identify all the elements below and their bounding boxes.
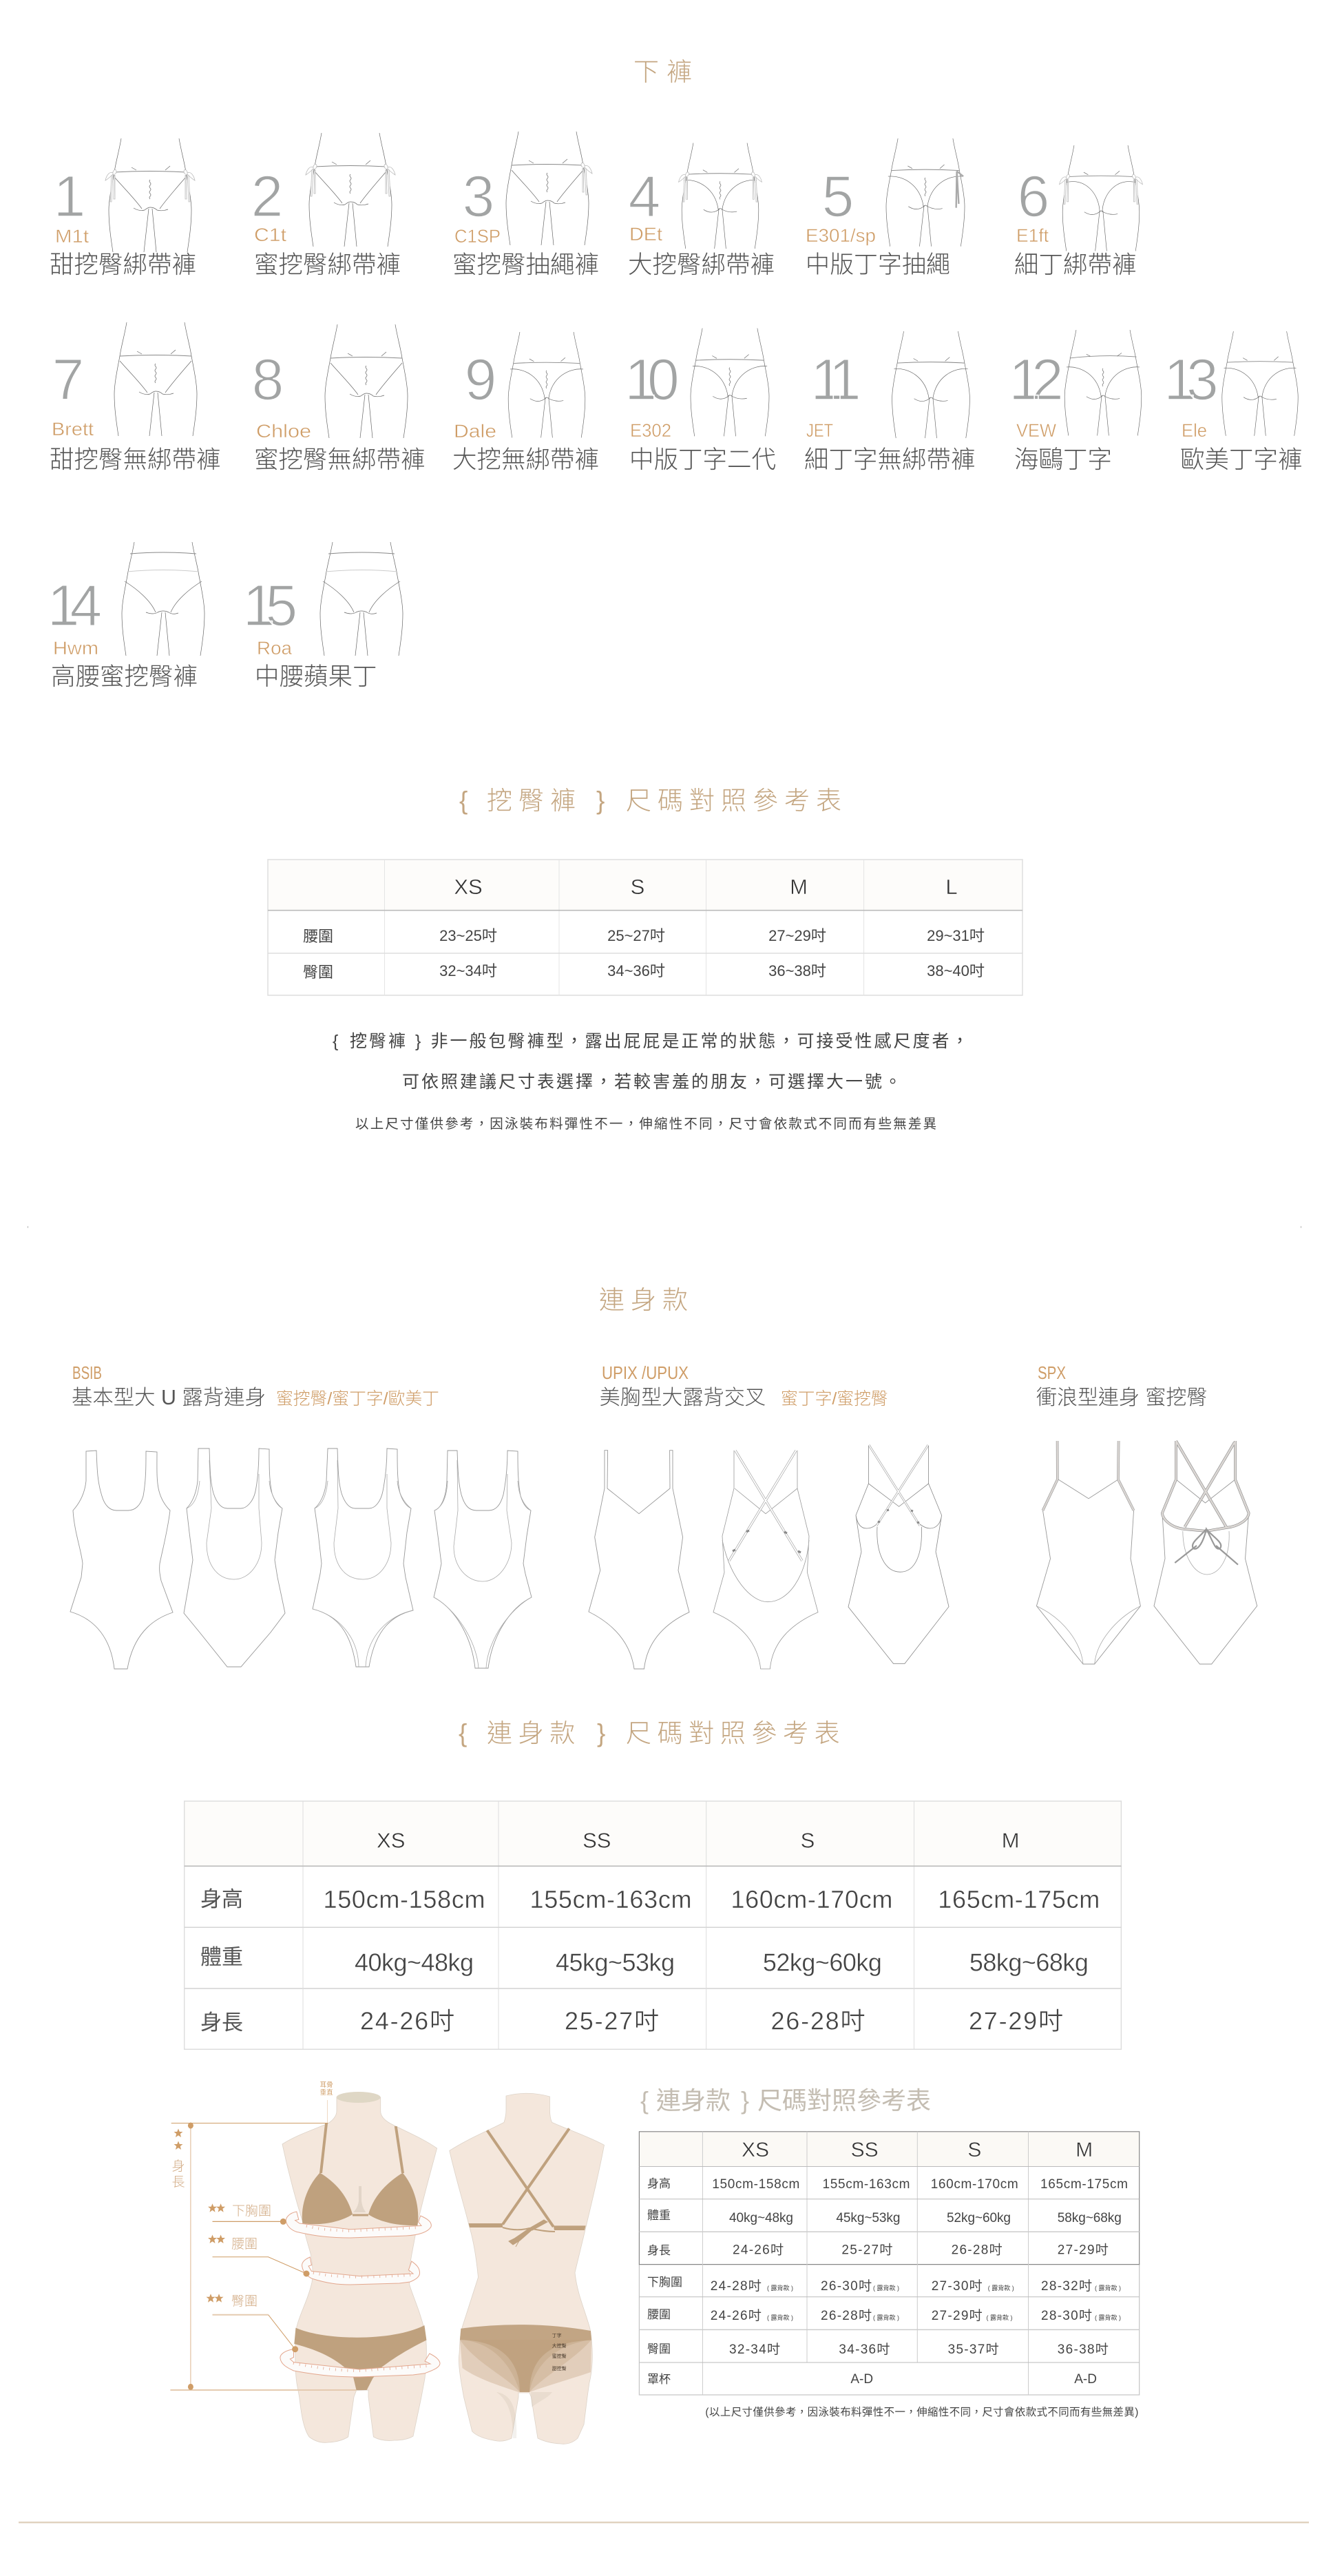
icon: brief 14 figure <box>122 542 204 656</box>
brief 9: 大挖無綁帶褲 <box>452 446 599 473</box>
table: 連身款 sizes: 40kg~48kg <box>355 1949 474 1977</box>
table: 挖臀褲 sizes: L <box>945 875 958 899</box>
icon: SPX back <box>1154 1441 1257 1664</box>
brief 14: 14 <box>48 573 101 638</box>
table: 連身款 detailed sizes: 下胸圍 <box>647 2276 682 2289</box>
brief 9: 9 <box>465 347 496 412</box>
icon: SPX front <box>1036 1441 1140 1664</box>
text block: 挖臀褲 notes: 非一般包臀褲型，露出屁屁是正常的狀態，可接受性感尺度者， <box>431 1032 971 1051</box>
text block: 挖臀褲 notes: { <box>333 1032 338 1051</box>
table: 連身款 detailed sizes: 160cm-170cm <box>931 2177 1018 2192</box>
icon: brief 5 figure <box>886 138 965 247</box>
icon: UPIX back <box>713 1451 818 1669</box>
table: 連身款 detailed sizes: 28-30吋 <box>1041 2308 1092 2323</box>
title: 連身款: 連身款 <box>599 1286 694 1314</box>
table: 連身款 sizes <box>185 1801 1121 2049</box>
brief 5 <box>806 138 965 278</box>
brief 1: 甜挖臀綁帶褲 <box>50 251 196 278</box>
brief 14 <box>48 542 204 690</box>
text block: 挖臀褲 notes: 以上尺寸僅供參考，因泳裝布料彈性不一，伸縮性不同，尺寸會依款式不同而有些無差異 <box>355 1116 938 1132</box>
brief 12: VEW <box>1016 420 1056 441</box>
table: 連身款 detailed sizes: 罩杯 <box>647 2373 671 2386</box>
table: 連身款 detailed sizes: 40kg~48kg <box>729 2211 793 2225</box>
annotation: body length: 身 <box>172 2159 185 2174</box>
brief 6: 6 <box>1018 164 1049 229</box>
brief 3 <box>452 132 599 278</box>
table: 挖臀褲 sizes: 32~34吋 <box>439 962 497 979</box>
brief 11: JET <box>806 420 833 441</box>
table: 挖臀褲 sizes: M <box>790 875 808 899</box>
icon: BSIB back deep <box>434 1451 532 1668</box>
table: 連身款 detailed sizes: 腰圍 <box>647 2308 671 2321</box>
table: 挖臀褲 sizes <box>268 860 1022 995</box>
panel: BSIB one-piece: BSIB <box>72 1362 102 1383</box>
brief 2: C1t <box>254 225 287 245</box>
heading: 挖臀褲 size table: } <box>596 787 605 815</box>
brief 13: 13 <box>1164 347 1217 412</box>
annotation: waist: 腰圍 <box>231 2237 258 2252</box>
table: 連身款 detailed sizes: 27-29吋 <box>1058 2242 1109 2257</box>
table: 連身款 detailed sizes: 24-26吋 <box>711 2308 762 2323</box>
panel: briefs row three <box>48 542 403 690</box>
table: 連身款 detailed sizes: 27-30吋 <box>932 2278 983 2294</box>
heading: 連身款 detailed table: } <box>741 2086 749 2115</box>
heading: 連身款 detailed table <box>640 2086 931 2115</box>
table: 連身款 detailed sizes: 26-30吋 <box>821 2278 872 2294</box>
table: 連身款 sizes: 25-27吋 <box>565 2007 659 2035</box>
brief 3: 蜜挖臀抽繩褲 <box>452 251 599 278</box>
table: 連身款 sizes: 150cm-158cm <box>324 1885 485 1913</box>
brief 10: 10 <box>625 347 678 412</box>
table: 連身款 sizes: XS <box>377 1829 405 1853</box>
table: 連身款 detailed sizes: 26-28吋 <box>821 2308 872 2323</box>
table: 連身款 detailed sizes: ( 露背款 ) <box>873 2314 899 2321</box>
labels: back cut names <box>552 2332 567 2371</box>
table: 挖臀褲 sizes: 臀圍 <box>303 964 333 981</box>
icon: brief 15 figure <box>320 542 403 656</box>
table: 連身款 detailed sizes: 24-28吋 <box>711 2278 762 2294</box>
icon: brief 11 figure <box>892 331 969 438</box>
table: 連身款 detailed sizes: 身長 <box>647 2244 671 2257</box>
table: 連身款 detailed sizes: 36-38吋 <box>1058 2342 1109 2357</box>
table: 連身款 detailed sizes: 28-32吋 <box>1041 2278 1092 2294</box>
text block: 挖臀褲 notes: 挖臀褲 <box>350 1032 408 1051</box>
heading: 連身款 size table <box>459 1719 846 1747</box>
annotation: body length: 長 <box>172 2175 185 2190</box>
heading: 連身款 size table: 尺碼對照參考表 <box>626 1719 846 1747</box>
bikini bottom back cuts <box>460 2325 591 2438</box>
table: 挖臀褲 sizes: XS <box>454 875 483 899</box>
brief 6: 細丁綁帶褲 <box>1014 251 1137 278</box>
icon: brief 12 figure <box>1064 330 1142 435</box>
heading: 連身款 size table: } <box>597 1719 605 1747</box>
heading: 連身款 detailed table: 尺碼對照參考表 <box>757 2086 931 2115</box>
text block: 挖臀褲 notes: } <box>415 1032 421 1051</box>
panel: briefs row two <box>50 322 1303 473</box>
labels: back cut names: 蜜挖臀 <box>552 2353 567 2359</box>
brief 11: 11 <box>810 347 859 412</box>
heading: 挖臀褲 size table: 挖臀褲 <box>487 787 582 815</box>
table: 連身款 sizes: 24-26吋 <box>360 2007 454 2035</box>
table: 連身款 sizes: 身高 <box>200 1887 243 1911</box>
icon: brief 8 figure <box>325 324 408 438</box>
table: 連身款 sizes: 155cm-163cm <box>530 1885 691 1913</box>
panel: BSIB one-piece <box>70 1362 532 1669</box>
brief 8: 蜜挖臀無綁帶褲 <box>254 446 426 473</box>
heading: 連身款 size table: 連身款 <box>487 1719 581 1747</box>
diagram: front mannequin with measurements <box>170 2081 440 2442</box>
table: 連身款 detailed sizes: ( 露背款 ) <box>1095 2284 1121 2292</box>
brief 11 <box>804 331 976 473</box>
brief 15: 15 <box>243 573 295 638</box>
brief 7: 甜挖臀無綁帶褲 <box>50 446 221 473</box>
brief 12: 海鷗丁字 <box>1014 446 1112 473</box>
icon: brief 7 figure <box>114 322 197 436</box>
heading: 挖臀褲 size table: { <box>459 787 468 815</box>
icon: brief 10 figure <box>691 329 769 436</box>
brief 14: 高腰蜜挖臀褲 <box>51 663 198 690</box>
table: 挖臀褲 sizes: 38~40吋 <box>927 962 985 979</box>
brief 1: M1t <box>55 226 90 247</box>
heading: 連身款 detailed table: 連身款 <box>656 2086 731 2115</box>
table: 連身款 detailed sizes: 34-36吋 <box>839 2342 890 2357</box>
table: 連身款 detailed sizes: 27-29吋 <box>932 2308 983 2323</box>
annotation: under bust <box>208 2203 286 2225</box>
table: 挖臀褲 sizes: 腰圍 <box>303 928 333 945</box>
table: 挖臀褲 sizes: 36~38吋 <box>768 962 826 979</box>
brief 5: E301/sp <box>806 225 876 246</box>
panel: SPX one-piece: 衝浪型連身 蜜挖臀 <box>1036 1386 1207 1409</box>
icon: BSIB back <box>184 1448 285 1667</box>
panel: SPX one-piece: SPX <box>1038 1362 1066 1383</box>
panel: UPIX one-piece: 蜜丁字/蜜挖臀 <box>781 1389 888 1409</box>
brief 2: 蜜挖臀綁帶褲 <box>254 251 401 278</box>
table: 連身款 detailed sizes: 155cm-163cm <box>822 2177 910 2192</box>
icon: brief 4 figure <box>679 143 762 249</box>
table: 連身款 detailed sizes: 32-34吋 <box>729 2342 780 2357</box>
label: ear vertical note <box>320 2081 333 2097</box>
table: 連身款 detailed sizes: ( 露背款 ) <box>767 2284 793 2292</box>
table: 連身款 detailed sizes: M <box>1076 2139 1093 2161</box>
table: 連身款 detailed sizes: ( 露背款 ) <box>1095 2314 1121 2321</box>
table: 連身款 sizes: SS <box>583 1829 611 1853</box>
brief 2: 2 <box>251 164 283 229</box>
brief 4: 4 <box>629 164 660 229</box>
text block: 挖臀褲 notes: 可依照建議尺寸表選擇，若較害羞的朋友，可選擇大一號。 <box>402 1072 903 1092</box>
table: 連身款 sizes: M <box>1002 1829 1020 1853</box>
icon: brief 3 figure <box>506 132 592 245</box>
diagram: back mannequin <box>450 2093 605 2444</box>
table: 連身款 sizes: 160cm-170cm <box>731 1885 892 1913</box>
annotation: hip <box>207 2294 298 2352</box>
measuring tapes <box>280 2212 440 2377</box>
table: 連身款 detailed sizes: 58kg~68kg <box>1058 2211 1122 2225</box>
heading: 連身款 size table: { <box>459 1719 467 1747</box>
brief 13: Ele <box>1182 420 1207 441</box>
brief 4: DEt <box>629 224 663 245</box>
table: 連身款 sizes: 45kg~53kg <box>556 1949 675 1977</box>
icon: brief 9 figure <box>508 332 585 437</box>
brief 6 <box>1014 145 1142 278</box>
text block: 挖臀褲 notes <box>333 1032 971 1132</box>
table: 連身款 sizes: 身長 <box>200 2011 243 2035</box>
table: 連身款 sizes: 58kg~68kg <box>969 1949 1089 1977</box>
brief 4 <box>628 143 775 278</box>
heading: 挖臀褲 size table: 尺碼對照參考表 <box>626 787 848 815</box>
table: 連身款 detailed sizes: 26-28吋 <box>952 2242 1003 2257</box>
table: 連身款 detailed sizes: ( 露背款 ) <box>988 2284 1014 2292</box>
brief 10: E302 <box>630 420 671 441</box>
icon: brief 6 figure <box>1060 145 1142 251</box>
panel: BSIB one-piece: 基本型大 U 露背連身 <box>72 1386 266 1409</box>
brief 7: 7 <box>52 347 84 412</box>
table: 挖臀褲 sizes: 34~36吋 <box>607 962 665 979</box>
table: 連身款 sizes: 體重 <box>200 1945 243 1969</box>
table: 挖臀褲 sizes: S <box>631 875 644 899</box>
brief 15: Roa <box>257 638 293 658</box>
icon: brief 1 figure <box>105 138 195 252</box>
brief 9: Dale <box>454 421 496 442</box>
table: 連身款 detailed sizes: 體重 <box>647 2209 671 2222</box>
table: 連身款 detailed sizes: 45kg~53kg <box>836 2211 900 2225</box>
icon: BSIB front <box>70 1451 173 1669</box>
table: 連身款 detailed sizes: 52kg~60kg <box>947 2211 1011 2225</box>
icon: UPIX back variant <box>848 1445 949 1663</box>
brief 10: 中版丁字二代 <box>629 446 776 473</box>
label: ear vertical note: 耳骨 <box>320 2081 333 2089</box>
brief 7: Brett <box>52 419 94 439</box>
brief 11: 細丁字無綁帶褲 <box>804 446 976 473</box>
panel: UPIX one-piece <box>589 1362 949 1669</box>
bikini bottom <box>294 2325 426 2390</box>
bikini top back <box>469 2128 586 2247</box>
table: 連身款 detailed sizes: 臀圍 <box>647 2343 671 2356</box>
brief 12: 12 <box>1009 347 1061 412</box>
table: 連身款 detailed sizes: A-D <box>850 2372 873 2387</box>
table: 連身款 sizes: S <box>801 1829 815 1853</box>
table: 連身款 detailed sizes: 150cm-158cm <box>712 2177 799 2192</box>
table: 挖臀褲 sizes: 25~27吋 <box>607 927 665 944</box>
table: 挖臀褲 sizes: 27~29吋 <box>768 927 826 944</box>
labels: back cut names: 丁字 <box>552 2332 562 2338</box>
annotation: body length <box>170 2123 357 2390</box>
brief 13: 歐美丁字褲 <box>1180 446 1303 473</box>
table: 連身款 detailed sizes: 24-26吋 <box>733 2242 784 2257</box>
body back <box>450 2093 605 2444</box>
brief 15 <box>243 542 403 690</box>
brief 3: C1SP <box>454 226 501 247</box>
table: 連身款 detailed sizes: SS <box>851 2139 879 2161</box>
table: 連身款 detailed sizes: XS <box>742 2139 769 2161</box>
icon: BSIB back thong <box>313 1448 413 1667</box>
brief 14: Hwm <box>53 638 98 658</box>
panel: BSIB one-piece: 蜜挖臀/蜜丁字/歐美丁 <box>276 1389 439 1409</box>
text block: size disclaimer: (以上尺寸僅供參考，因泳裝布料彈性不一，伸縮性不同，尺寸會依款式不同而有些無差異) <box>705 2406 1138 2418</box>
table: 連身款 sizes: 26-28吋 <box>771 2007 865 2035</box>
brief 10 <box>625 329 776 473</box>
table: 連身款 sizes: 27-29吋 <box>969 2007 1063 2035</box>
brief 2 <box>251 133 401 278</box>
brief 7 <box>50 322 221 473</box>
table: 連身款 detailed sizes: 身高 <box>647 2177 671 2190</box>
table: 挖臀褲 sizes: 29~31吋 <box>927 927 985 944</box>
brief 3: 3 <box>463 164 494 229</box>
body front <box>282 2097 437 2442</box>
bikini top <box>302 2123 418 2225</box>
brief 13 <box>1164 331 1303 473</box>
brief 5: 5 <box>822 164 854 229</box>
annotation: under bust: 下胸圍 <box>232 2203 271 2219</box>
brief 4: 大挖臀綁帶褲 <box>628 251 775 278</box>
brief 1: 1 <box>54 164 85 229</box>
table: 連身款 sizes: 52kg~60kg <box>763 1949 882 1977</box>
table: 連身款 detailed sizes: ( 露背款 ) <box>986 2314 1012 2321</box>
table: 連身款 detailed sizes: ( 露背款 ) <box>767 2314 793 2321</box>
table: 挖臀褲 sizes: 23~25吋 <box>439 927 497 944</box>
table: 連身款 detailed sizes: 25-27吋 <box>841 2242 892 2257</box>
brief 5: 中版丁字抽繩 <box>806 251 950 278</box>
panel: UPIX one-piece: 美胸型大露背交叉 <box>600 1386 766 1409</box>
table: 連身款 detailed sizes: A-D <box>1074 2372 1097 2387</box>
brief 9 <box>452 332 599 473</box>
heading: 挖臀褲 size table <box>459 787 848 815</box>
brief 8: Chloe <box>256 421 311 442</box>
brief 12 <box>1009 330 1142 473</box>
title: 下褲: 下褲 <box>633 58 700 86</box>
brief 8 <box>252 324 426 473</box>
labels: back cut names: 甜挖臀 <box>552 2365 567 2371</box>
brief 1 <box>50 138 196 278</box>
brief 6: E1ft <box>1016 225 1049 246</box>
annotation: waist <box>208 2234 310 2277</box>
panel: briefs row one <box>50 132 1142 278</box>
brief 8: 8 <box>252 347 284 412</box>
table: 連身款 detailed sizes: S <box>967 2139 981 2161</box>
icon: brief 13 figure <box>1222 331 1298 436</box>
heading: 連身款 detailed table: { <box>640 2086 649 2115</box>
panel: UPIX one-piece: UPIX /UPUX <box>602 1362 689 1383</box>
labels: back cut names: 大挖臀 <box>552 2343 567 2349</box>
table: 連身款 detailed sizes: 165cm-175cm <box>1040 2177 1128 2192</box>
icon: UPIX front <box>589 1451 689 1669</box>
panel: SPX one-piece <box>1036 1362 1257 1664</box>
table: 連身款 detailed sizes: ( 露背款 ) <box>873 2284 899 2292</box>
brief 15: 中腰蘋果丁 <box>255 663 377 690</box>
icon: brief 2 figure <box>306 133 395 247</box>
table: 連身款 sizes: 165cm-175cm <box>938 1885 1100 1913</box>
annotation: hip: 臀圍 <box>231 2294 258 2309</box>
table: 連身款 detailed sizes <box>639 2132 1140 2395</box>
table: 連身款 detailed sizes: 35-37吋 <box>948 2342 999 2357</box>
label: ear vertical note: 垂直 <box>320 2088 333 2097</box>
